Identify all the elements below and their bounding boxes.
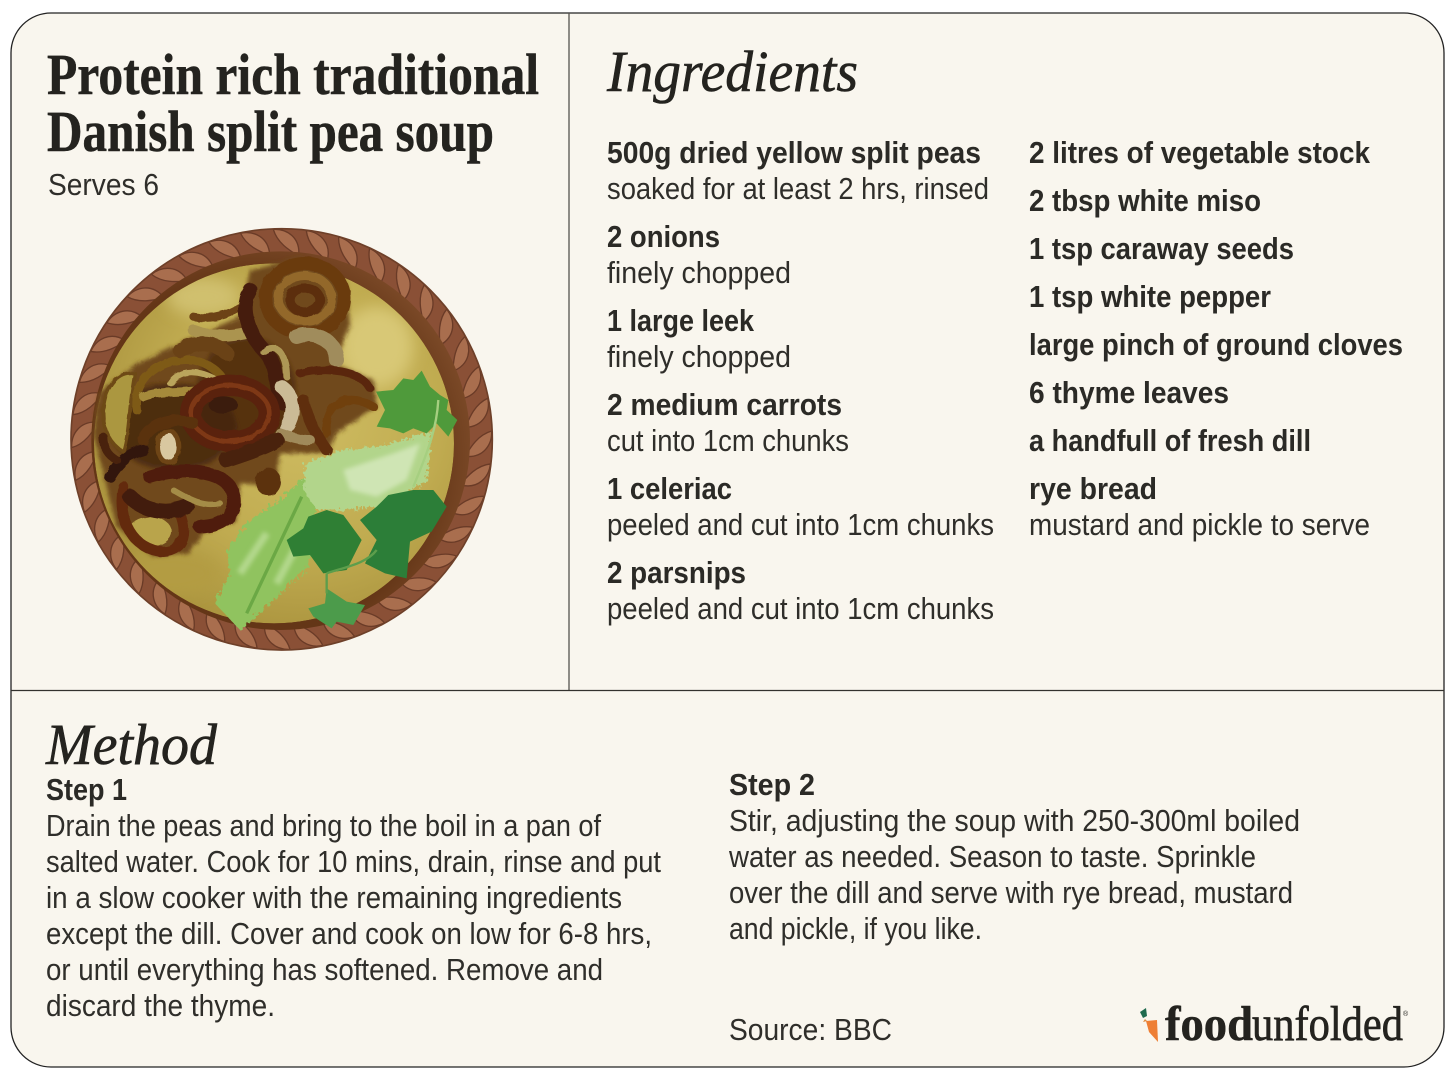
- ingredient: split peas: [607, 135, 989, 206]
- method: step 2: over the dill and serve with rye bread, mustard: [729, 875, 1293, 910]
- lettuce leaf: [215, 432, 432, 630]
- ingredient: carrots: 2 medium carrots: [607, 387, 842, 422]
- ingredient: celeriac: 1 celeriac: [607, 471, 732, 506]
- ingredient: split peas: soaked for at least 2 hrs, rinsed: [607, 171, 989, 206]
- method: step 1: except the dill. Cover and cook on low for 6-8 hrs,: [46, 916, 652, 951]
- ingredient: leek: finely chopped: [607, 339, 791, 374]
- method: step 1: in a slow cooker with the remaining ingredients: [46, 880, 622, 915]
- method: step 2: [728, 767, 1300, 946]
- ingredient: onions: 2 onions: [607, 219, 720, 254]
- ingredients list: column 2: rye bread: [1029, 471, 1157, 506]
- servings text: Serves 6: [48, 167, 159, 202]
- parsley sprigs: [287, 371, 457, 628]
- ingredient: onions: [607, 219, 791, 290]
- ingredient: parsnips: [607, 555, 994, 626]
- method: step 1: salted water. Cook for 10 mins, drain, rinse and put: [46, 844, 661, 879]
- ingredients list: column 2: 6 thyme leaves: [1029, 375, 1229, 410]
- method: step 1: Step 1: [46, 772, 127, 807]
- ingredients list: column 2: a handfull of fresh dill: [1029, 423, 1311, 458]
- ingredient: onions: finely chopped: [607, 255, 791, 290]
- illustration: bowl of split pea soup: [71, 229, 492, 650]
- ingredient: split peas: 500g dried yellow split peas: [607, 135, 981, 170]
- ingredients list: column 1: [607, 135, 994, 626]
- source credit: Source: BBC: [729, 1012, 892, 1047]
- ingredient: leek: [607, 303, 791, 374]
- ingredient: carrots: cut into 1cm chunks: [607, 423, 849, 458]
- ingredient: celeriac: [607, 471, 994, 542]
- title: [47, 42, 539, 164]
- method: step 1: Drain the peas and bring to the boil in a pan of: [46, 808, 601, 843]
- caramelised onions: [93, 257, 377, 557]
- soup: [94, 263, 454, 623]
- ingredients list: column 2: [1029, 135, 1403, 542]
- title: Danish split pea soup: [47, 99, 494, 164]
- title: Protein rich traditional: [47, 42, 539, 107]
- method: step 2: and pickle, if you like.: [729, 911, 982, 946]
- heading: method: Method: [45, 712, 218, 777]
- ingredient: parsnips: 2 parsnips: [607, 555, 746, 590]
- heading: ingredients: Ingredients: [606, 39, 858, 104]
- ingredients list: column 2: 2 tbsp white miso: [1029, 183, 1261, 218]
- lettuce highlights: [240, 443, 420, 613]
- logo: foodunfolded: [1140, 996, 1409, 1051]
- ingredients list: column 2: 1 tsp white pepper: [1029, 279, 1271, 314]
- ingredient: leek: 1 large leek: [607, 303, 755, 338]
- bowl rim: [71, 229, 492, 650]
- logo: foodunfolded: food: [1165, 996, 1253, 1051]
- ingredients list: column 2: large pinch of ground cloves: [1029, 327, 1403, 362]
- method: step 2: Stir, adjusting the soup with 250-300ml boiled: [729, 803, 1300, 838]
- method: step 1: or until everything has softened. Remove and: [46, 952, 603, 987]
- ingredient: parsnips: peeled and cut into 1cm chunks: [607, 591, 994, 626]
- ingredient: celeriac: peeled and cut into 1cm chunks: [607, 507, 994, 542]
- ingredient: carrots: [607, 387, 849, 458]
- method: step 2: water as needed. Season to taste. Sprinkle: [728, 839, 1256, 874]
- ingredients list: column 2: 2 litres of vegetable stock: [1029, 135, 1371, 170]
- ingredients list: column 2: 1 tsp caraway seeds: [1029, 231, 1294, 266]
- ingredients list: column 2: mustard and pickle to serve: [1029, 507, 1370, 542]
- logo: foodunfolded: ®: [1403, 1010, 1409, 1018]
- method: step 1: [46, 772, 661, 1023]
- icon: carrot: [1140, 1008, 1158, 1042]
- method: step 2: Step 2: [729, 767, 815, 802]
- logo: foodunfolded: unfolded: [1252, 996, 1403, 1051]
- method: step 1: discard the thyme.: [46, 988, 275, 1023]
